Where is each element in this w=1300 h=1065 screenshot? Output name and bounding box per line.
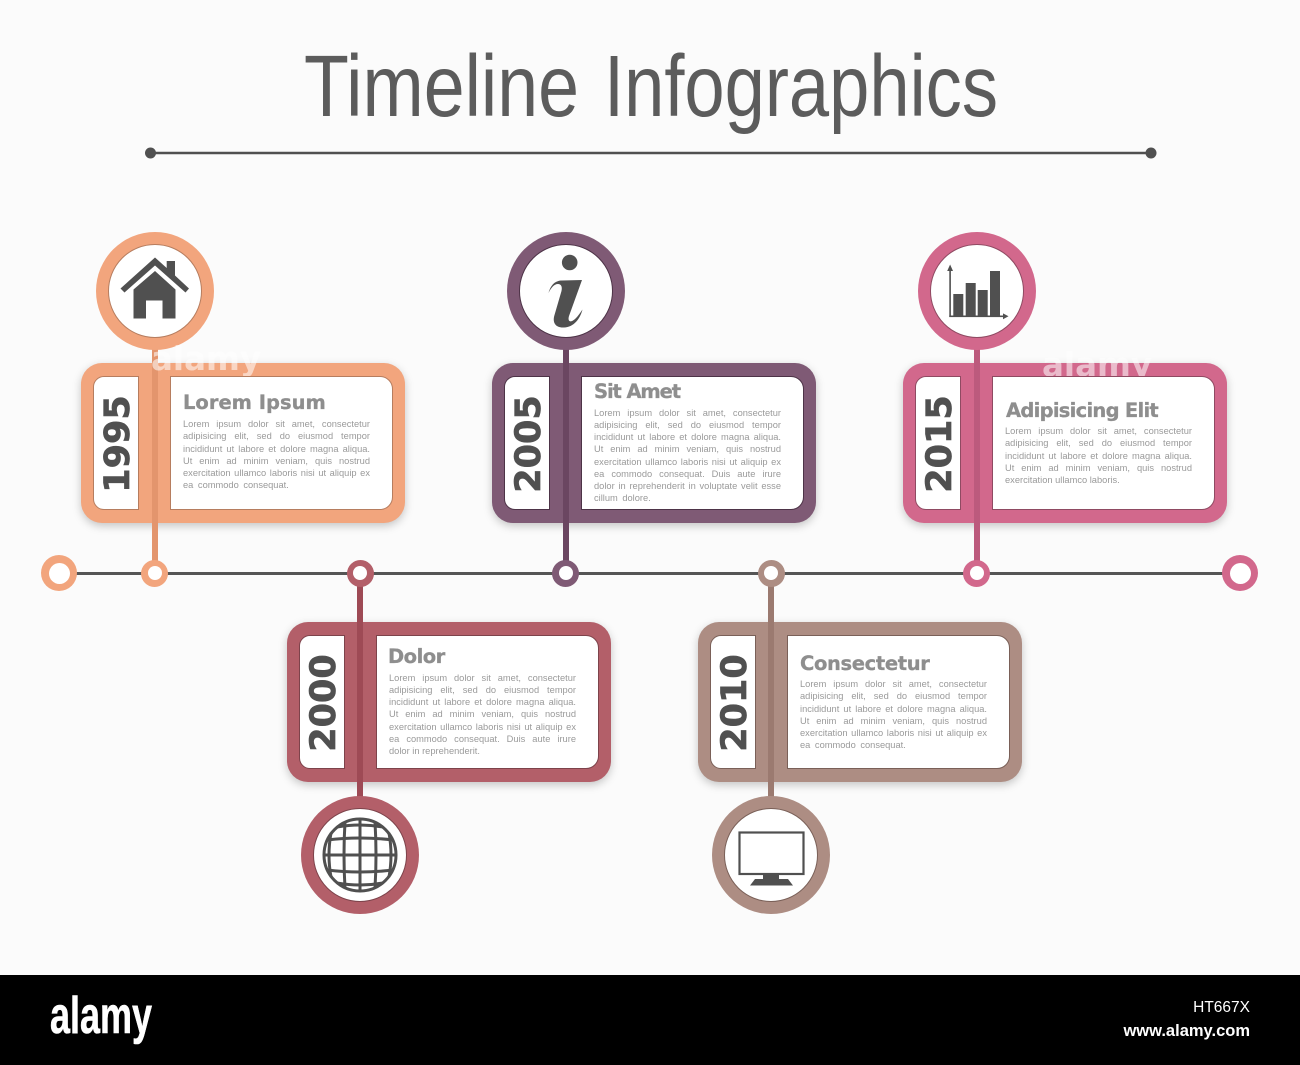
- panel: 2000: [287, 622, 611, 782]
- body text: incididunt ut labore et dolore magna aliqua.: [800, 704, 987, 714]
- body text: Ut enim ad minim veniam, quis nostrud: [1005, 463, 1192, 473]
- body text: incididunt ut labore et dolore magna aliqua.: [389, 697, 576, 707]
- text box: [992, 376, 1215, 510]
- body text: ea commodo consequat.: [183, 480, 289, 490]
- body text: Ut enim ad minim veniam, quis nostrud: [594, 444, 781, 454]
- title: [304, 38, 998, 135]
- circle 1995: [96, 232, 214, 350]
- heading: Consectetur: [800, 652, 930, 674]
- text box: [581, 376, 804, 510]
- year box: [915, 376, 961, 510]
- body text: Lorem ipsum dolor sit amet, consectetur: [389, 672, 576, 682]
- node 2000: [346, 560, 374, 586]
- year box: [710, 635, 756, 769]
- year box: 2000: [304, 654, 344, 752]
- text box: [787, 635, 1010, 769]
- body text: dolor in reprehenderit in voluptate velit esse: [594, 481, 781, 491]
- footer logo: alamy: [50, 987, 152, 1045]
- body text: [800, 679, 987, 750]
- icon: house: [120, 258, 189, 318]
- body text: Lorem ipsum dolor sit amet, consectetur: [1005, 426, 1192, 436]
- body text: [183, 419, 370, 490]
- circle 2010: [712, 796, 830, 914]
- icon: bar chart: [947, 264, 1008, 320]
- stem 2010: [768, 582, 774, 807]
- body text: exercitation ullamco laboris nisi ut aliquip ex: [594, 456, 781, 466]
- year box: [504, 376, 550, 510]
- body text: exercitation ullamco laboris nisi ut aliquip ex: [800, 728, 987, 738]
- year box: 1995: [98, 395, 138, 493]
- heading: Dolor: [388, 644, 445, 668]
- body text: adipisicing elit, sed do eiusmod tempor: [389, 685, 576, 695]
- body text: Lorem ipsum dolor sit amet, consectetur: [594, 408, 781, 418]
- website: www.alamy.com: [1123, 1022, 1250, 1040]
- body text: incididunt ut labore et dolore magna aliqua.: [1005, 450, 1192, 460]
- body text: exercitation ullamco laboris nisi ut aliquip ex: [183, 468, 370, 478]
- image id: HT667X: [1193, 999, 1250, 1016]
- body text: ea commodo consequat.: [800, 740, 906, 750]
- node 2015: [963, 560, 990, 586]
- year box: 2005: [509, 395, 549, 493]
- body text: exercitation ullamco laboris.: [1005, 475, 1120, 485]
- title: Timeline: [304, 38, 579, 135]
- circle 2005: [506, 232, 624, 350]
- body text: Ut enim ad minim veniam, quis nostrud: [800, 716, 987, 726]
- body text: Lorem ipsum dolor sit amet, consectetur: [183, 419, 370, 429]
- body text: dolor in reprehenderit.: [389, 746, 480, 756]
- year box: 2015: [920, 395, 960, 493]
- text box: [170, 376, 393, 510]
- heading: Sit Amet: [594, 380, 680, 402]
- body text: cillum dolore.: [594, 493, 651, 503]
- timeline axis: [60, 572, 1240, 574]
- start node: [41, 555, 77, 591]
- end node: [1222, 555, 1258, 591]
- body text: Ut enim ad minim veniam, quis nostrud: [183, 456, 370, 466]
- text box: [376, 635, 599, 769]
- circle 2015: [918, 232, 1036, 350]
- body text: exercitation ullamco laboris nisi ut aliquip ex: [389, 722, 576, 732]
- heading: Adipisicing Elit: [1006, 398, 1158, 422]
- stem 2000: [357, 582, 363, 807]
- year box: [299, 635, 345, 769]
- stem 2005: [562, 340, 568, 565]
- title: Infographics: [604, 38, 998, 135]
- stem 1995: [152, 340, 158, 565]
- body text: incididunt ut labore et dolore magna aliqua.: [183, 444, 370, 454]
- panel: 2005: [492, 363, 816, 523]
- node 2005: [552, 560, 579, 586]
- body text: adipisicing elit, sed do eiusmod tempor: [1005, 438, 1192, 448]
- panel: 2015: [903, 363, 1227, 523]
- icon: info: [548, 254, 582, 328]
- circle 2000: [301, 796, 419, 914]
- body text: Ut enim ad minim veniam, quis nostrud: [389, 709, 576, 719]
- body text: Lorem ipsum dolor sit amet, consectetur: [800, 679, 987, 689]
- body text: ea commodo consequat. Duis aute irure: [389, 734, 576, 744]
- body text: incididunt ut labore et dolore magna aliqua.: [594, 432, 781, 442]
- stem 2015: [974, 340, 980, 565]
- body text: adipisicing elit, sed do eiusmod tempor: [594, 420, 781, 430]
- body text: [1005, 426, 1192, 485]
- year box: [93, 376, 139, 510]
- node 1995: [141, 560, 168, 586]
- body text: adipisicing elit, sed do eiusmod tempor: [183, 431, 370, 441]
- title rule: [145, 148, 1156, 158]
- body text: ea commodo consequat. Duis aute irure: [594, 469, 781, 479]
- body text: [389, 672, 576, 756]
- footer bar: [0, 975, 1300, 1065]
- body text: adipisicing elit, sed do eiusmod tempor: [800, 691, 987, 701]
- panel: 2010: [698, 622, 1022, 782]
- panel: 1995: [81, 363, 405, 523]
- heading: Lorem Ipsum: [183, 391, 326, 414]
- year box: 2010: [715, 654, 755, 752]
- body text: [594, 408, 781, 503]
- node 2010: [758, 560, 784, 586]
